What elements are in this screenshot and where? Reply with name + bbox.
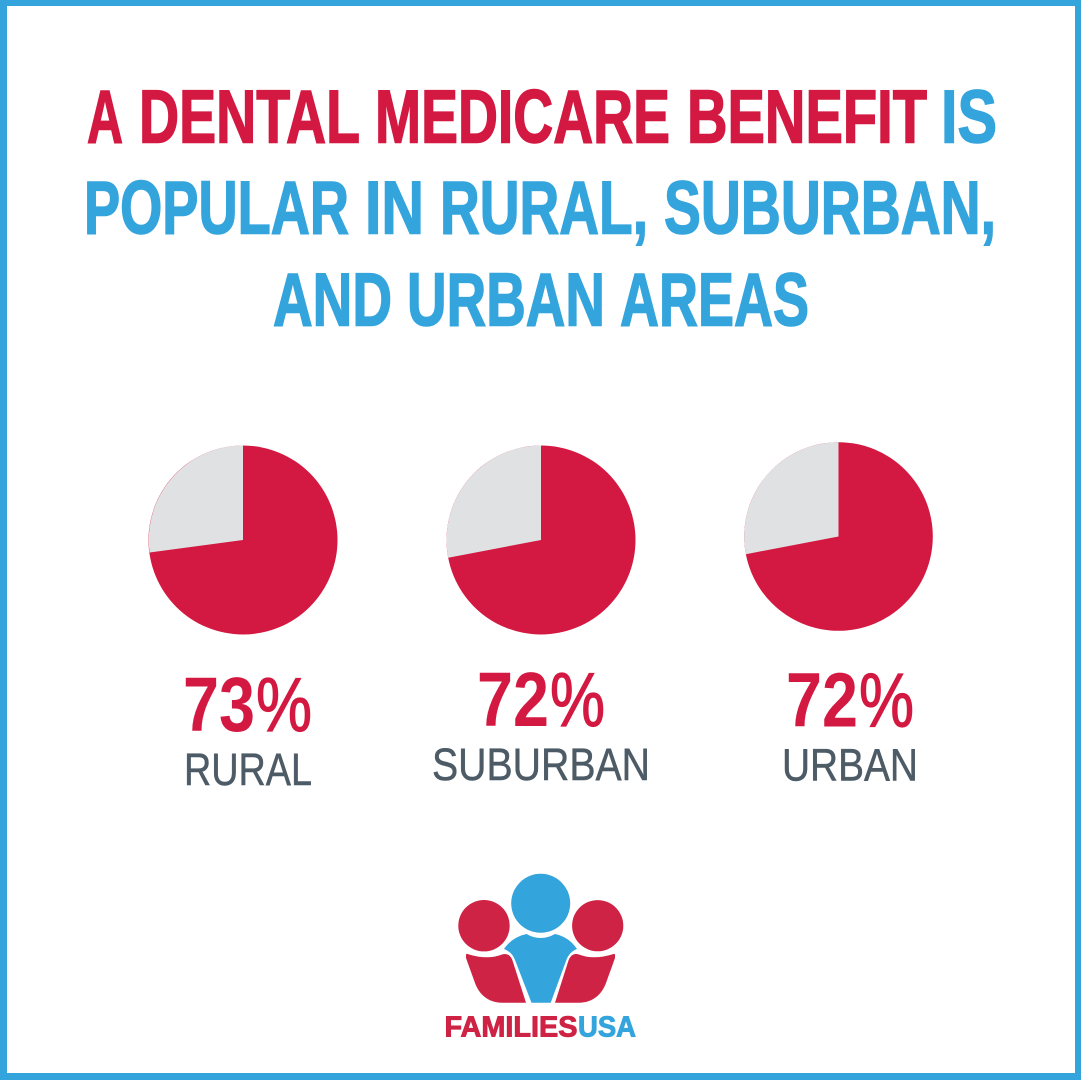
stat: suburban: SUBURBAN: [432, 739, 650, 790]
logo wordmark: [444, 1012, 636, 1044]
title: DENTAL: [139, 74, 360, 158]
stat: urban: 72: [786, 658, 858, 744]
stat: suburban: 72: [477, 657, 549, 743]
stat: urban: URBAN: [782, 740, 918, 790]
logo wordmark: USA: [578, 1012, 636, 1044]
icon: right person: [555, 900, 623, 1003]
title: BENEFIT: [687, 74, 927, 158]
pie chart: rural 73%: [148, 446, 338, 634]
pie chart: suburban 72%: [446, 446, 636, 634]
title: RURAL,: [440, 166, 648, 250]
stat: suburban: %: [550, 658, 605, 743]
title: URBAN: [407, 258, 605, 342]
stat: suburban: [432, 657, 650, 790]
stat: urban: [782, 658, 918, 790]
stat: rural: [183, 662, 312, 795]
icon: centre person: [504, 874, 577, 1003]
title: AREAS: [620, 258, 809, 342]
pie chart: urban 72%: [744, 442, 933, 631]
title: IS: [941, 74, 997, 158]
stat: urban: %: [859, 658, 914, 744]
stat: rural: %: [256, 663, 312, 748]
title: A: [87, 74, 123, 158]
title: AND: [273, 258, 392, 342]
stat: rural: 73: [183, 662, 255, 748]
stat: rural: RURAL: [184, 744, 312, 795]
title: MEDICARE: [375, 74, 670, 158]
title: IN: [365, 166, 424, 250]
logo: Families USA: [444, 874, 636, 1044]
title: POPULAR: [84, 166, 349, 250]
icon: left person: [458, 900, 526, 1003]
logo wordmark: FAMILIES: [444, 1012, 578, 1044]
title: [84, 74, 997, 342]
